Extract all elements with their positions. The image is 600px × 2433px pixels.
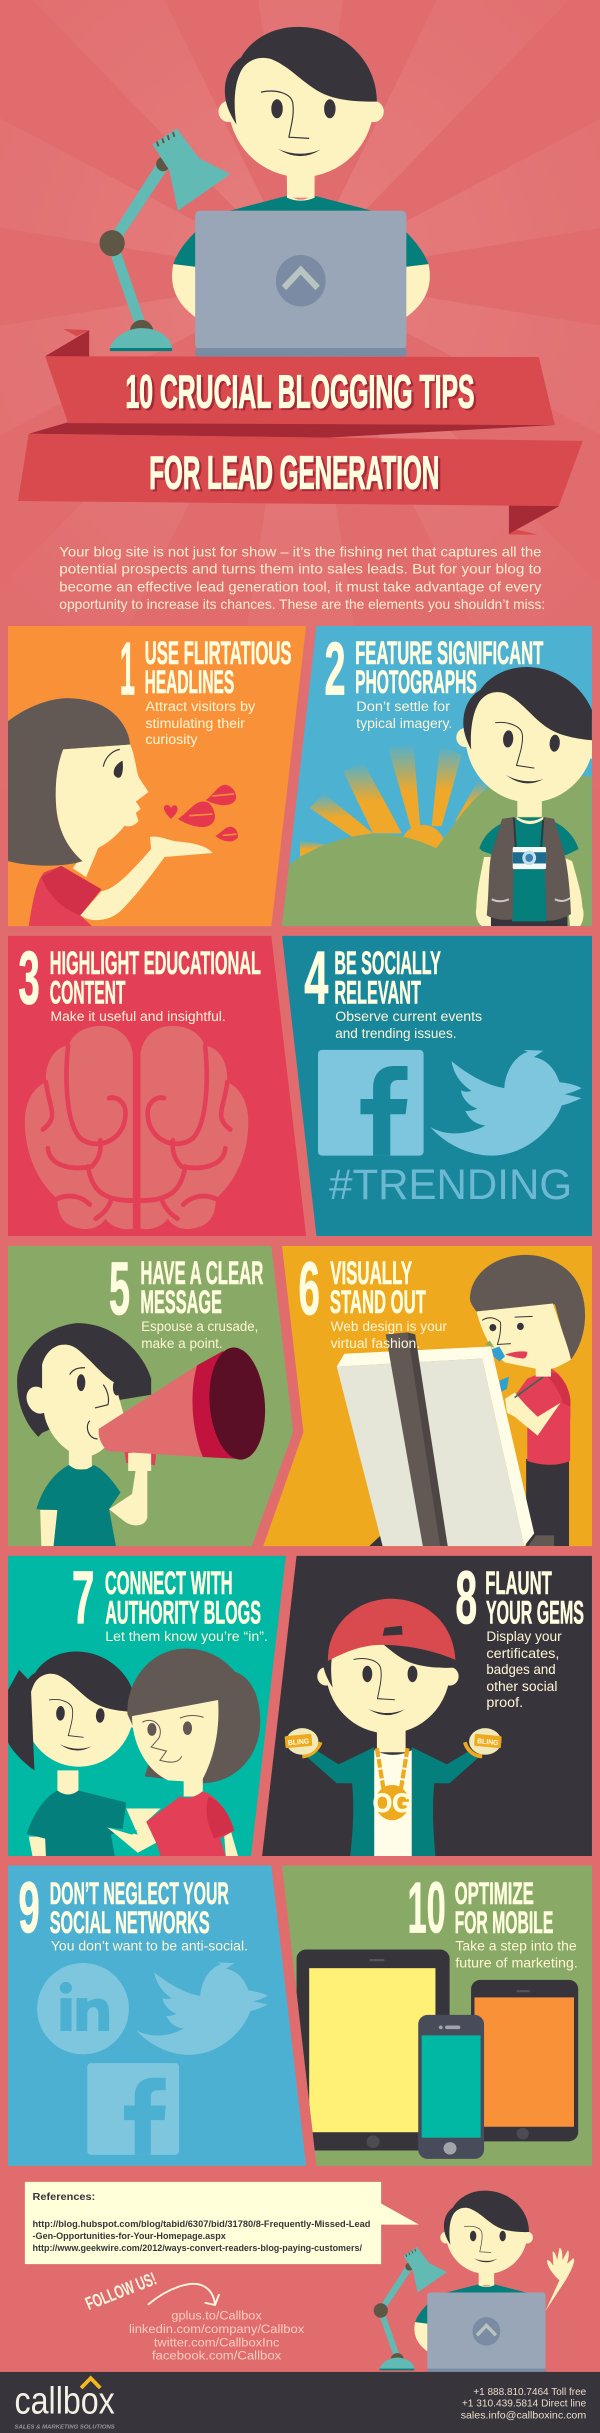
follow us: twitter.com/CallboxInc [154, 2336, 279, 2349]
panel 5: clear message: Espouse a crusade, [141, 1319, 258, 1334]
panel 1: flirtatious headlines: stimulating their [145, 716, 245, 731]
row 3 and 4 panels [8, 1246, 592, 1856]
references speech bubble: http://www.geekwire.com/2012/ways-convert-readers-blog-paying-customers/ [33, 2243, 362, 2253]
row 5 panels and footer [0, 1865, 600, 2433]
panel 9: social networks: You don’t want to be anti-social. [51, 1938, 248, 1954]
follow us [82, 2268, 304, 2362]
panel 8: flaunt your gems [262, 1556, 592, 1856]
panel 4: socially relevant: 4 [304, 937, 329, 1020]
panel 2: significant photographs: typical imagery. [356, 716, 452, 731]
footer bar: +1 310.439.5814 Direct line [462, 2399, 587, 2410]
follow us: gplus.to/Callbox [171, 2309, 262, 2323]
panel 8: flaunt your gems: Display your [486, 1629, 562, 1644]
man with laptop and lamp [99, 27, 430, 357]
panel 6: visually stand out: STAND OUT [330, 1284, 426, 1320]
panel 8: flaunt your gems: other social [486, 1679, 558, 1694]
panel 8: flaunt your gems: 8 [455, 1557, 477, 1640]
panel 10: optimize for mobile [282, 1865, 592, 2166]
footer bar: sales.info@callboxinc.com [461, 2411, 586, 2421]
panel 4: socially relevant: BE SOCIALLY [334, 945, 441, 981]
panel 1: flirtatious headlines: curiosity [145, 732, 198, 747]
panel 8: flaunt your gems: badges and [486, 1662, 556, 1677]
panel 7: authority blogs: AUTHORITY BLOGS [105, 1595, 261, 1630]
panel 8: flaunt your gems: certificates, [486, 1646, 559, 1661]
panel 6: visually stand out [263, 1246, 592, 1546]
panel 9: social networks [8, 1865, 306, 2166]
panel 4: socially relevant: and trending issues. [335, 1026, 457, 1041]
panel 3: educational content [8, 936, 306, 1236]
title [126, 365, 477, 501]
follow us: facebook.com/Callbox [152, 2349, 281, 2362]
intro text: potential prospects and turns them into sales leads. But for your blog to [59, 562, 541, 577]
panel 10: optimize for mobile: future of marketing. [455, 1955, 578, 1970]
panel 4: socially relevant: RELEVANT [334, 975, 421, 1010]
panel 9: social networks: 9 [18, 1867, 40, 1948]
waving man with laptop [374, 2191, 574, 2373]
panel 3: educational content: HIGHLIGHT EDUCATIONAL [50, 945, 261, 981]
panel 3: educational content: CONTENT [50, 975, 126, 1010]
panel 7: authority blogs: Let them know you’re “in”. [105, 1629, 268, 1644]
panel 6: visually stand out: 6 [298, 1248, 320, 1331]
panel 8: flaunt your gems: BLING [477, 1738, 499, 1747]
panel 8: flaunt your gems: OG [373, 1790, 412, 1818]
intro text: Your blog site is not just for show – it’s the fishing net that captures all the [59, 544, 541, 559]
panel 4: socially relevant: #TRENDING [329, 1160, 572, 1208]
panel 4: socially relevant: Observe current events [335, 1009, 482, 1024]
footer bar: SALES & MARKETING SOLUTIONS [15, 2425, 115, 2431]
follow us: linkedin.com/company/Callbox [129, 2322, 304, 2336]
panel 1: flirtatious headlines: HEADLINES [145, 664, 234, 700]
footer bar: callbox [15, 2380, 115, 2422]
panel 6: visually stand out: Web design is your [331, 1319, 448, 1334]
panel 8: flaunt your gems: BLING [288, 1738, 310, 1747]
panel 7: authority blogs: 7 [72, 1557, 95, 1640]
intro text [59, 544, 545, 612]
panel 1: flirtatious headlines: Attract visitors by [145, 699, 256, 714]
references speech bubble: References: [33, 2192, 95, 2203]
header section [0, 0, 600, 870]
panel 5: clear message: make a point. [141, 1336, 223, 1351]
references speech bubble: -Gen-Opportunities-for-Your-Homepage.aspx [33, 2231, 227, 2241]
panel 2: significant photographs: Don’t settle for [356, 699, 451, 714]
footer bar [0, 2372, 600, 2433]
panel 9: social networks: SOCIAL NETWORKS [50, 1905, 210, 1940]
panel 5: clear message [8, 1246, 293, 1546]
panel 2: significant photographs: PHOTOGRAPHS [355, 664, 477, 700]
intro text: become an effective lead generation tool, it must take advantage of every [59, 579, 542, 595]
panel 4: socially relevant [282, 936, 592, 1236]
panel 2: significant photographs [282, 626, 600, 926]
sunburst rays [0, 0, 600, 870]
references speech bubble [25, 2182, 419, 2264]
panel 3: educational content: 3 [18, 937, 40, 1020]
panel 1: flirtatious headlines: USE FLIRTATIOUS [145, 635, 292, 671]
panel 7: authority blogs [8, 1556, 286, 1856]
row 1 and 2 panels [8, 626, 600, 1236]
panel 6: visually stand out: VISUALLY [330, 1255, 412, 1291]
follow us: FOLLOW US! [82, 2268, 159, 2314]
panel 10: optimize for mobile: Take a step into the [455, 1938, 577, 1954]
references speech bubble: http://blog.hubspot.com/blog/tabid/6307/bid/31780/8-Frequently-Missed-Lead [33, 2219, 371, 2229]
panel 1: flirtatious headlines [8, 626, 306, 926]
panel 8: flaunt your gems: proof. [486, 1695, 523, 1710]
footer bar: +1 888.810.7464 Toll free [473, 2387, 587, 2398]
panel 2: significant photographs: 2 [324, 628, 346, 711]
panel 1: flirtatious headlines: 1 [120, 628, 135, 711]
panel 5: clear message: HAVE A CLEAR [140, 1255, 263, 1291]
panel 5: clear message: MESSAGE [140, 1284, 222, 1320]
panel 10: optimize for mobile: 10 [408, 1867, 446, 1948]
panel 3: educational content: Make it useful and insightful. [51, 1009, 226, 1024]
panel 9: social networks: DON’T NEGLECT YOUR [50, 1876, 229, 1911]
intro text: opportunity to increase its chances. These are the elements you shouldn’t miss: [59, 597, 545, 612]
ribbon [18, 329, 583, 535]
panel 5: clear message: 5 [109, 1248, 130, 1331]
panel 7: authority blogs: CONNECT WITH [105, 1565, 233, 1601]
panel 6: visually stand out: virtual fashion. [331, 1336, 420, 1351]
